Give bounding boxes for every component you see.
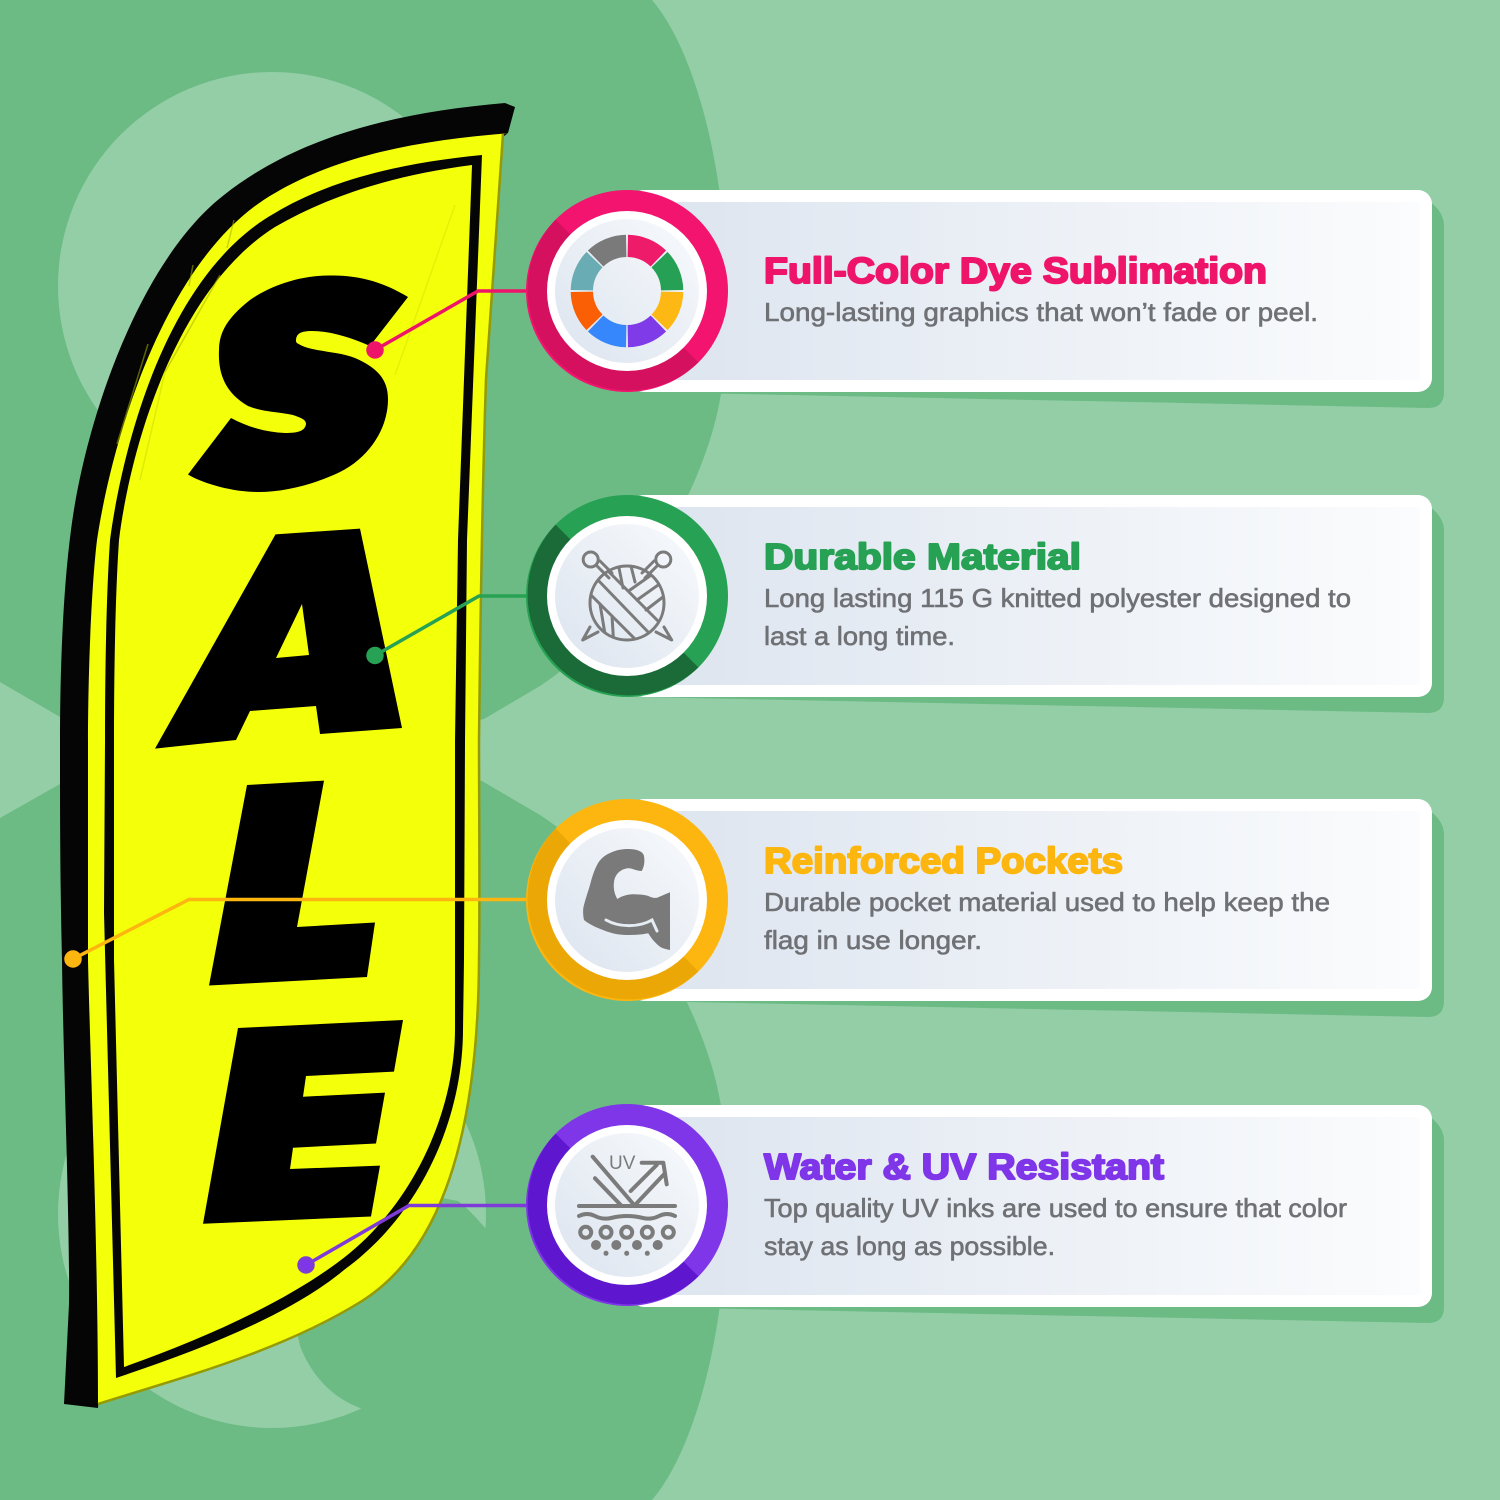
icon: yarn ball with needles [583,552,672,648]
card 3: reinforced pockets [630,799,1444,1017]
card shadow [640,202,1444,408]
flag black band [60,103,515,1408]
card shadow [640,1117,1444,1323]
badge: yarn [526,495,728,697]
badge: muscle [526,799,728,1001]
letter L [209,781,375,986]
description: Long lasting 115 G knitted polyester designed to [764,583,1351,613]
letter A [155,529,402,749]
card inner gradient [630,811,1420,989]
heading: Water & UV Resistant [764,1146,1164,1187]
letter S [188,275,408,492]
description: flag in use longer. [764,925,982,955]
flag inner border [104,155,482,1378]
heading: Durable Material [764,536,1081,577]
description: stay as long as possible. [764,1231,1055,1261]
card shadow [640,507,1444,713]
description: Top quality UV inks are used to ensure that color [764,1193,1347,1223]
card panel [630,799,1432,1001]
card panel [630,190,1432,392]
badge: color wheel [526,190,728,392]
flag wrinkles [117,205,455,480]
card inner gradient [630,1117,1420,1295]
connector: yellow [66,900,530,966]
card 2: durable material [630,495,1444,713]
icon: flexed arm [583,849,670,950]
connector: pink [368,291,530,357]
icon: color wheel [563,227,691,355]
description: Durable pocket material used to help keep the [764,887,1330,917]
description: last a long time. [764,621,955,651]
card inner gradient [630,202,1420,380]
flag [60,103,515,1408]
description [764,887,1330,955]
description [764,583,1351,651]
card shadow [640,811,1444,1017]
card panel [630,495,1432,697]
heading: Reinforced Pockets [764,840,1123,881]
card 4: water and uv resistant [630,1105,1444,1323]
description: Long-lasting graphics that won’t fade or peel. [764,297,1318,327]
card 1: full-color dye sublimation [630,190,1444,408]
connector: green [368,596,530,662]
icon: uv reflection layers: UV [609,1153,636,1174]
card inner gradient [630,507,1420,685]
flag stitched edge [98,134,503,1404]
flag yellow field [88,133,510,1404]
icon: uv reflection layers [579,1153,675,1256]
heading: Full-Color Dye Sublimation [764,250,1267,291]
badge: uv [526,1104,728,1306]
card panel [630,1105,1432,1307]
letter E [203,1020,403,1224]
description [764,1193,1347,1261]
connector: purple [299,1206,530,1272]
